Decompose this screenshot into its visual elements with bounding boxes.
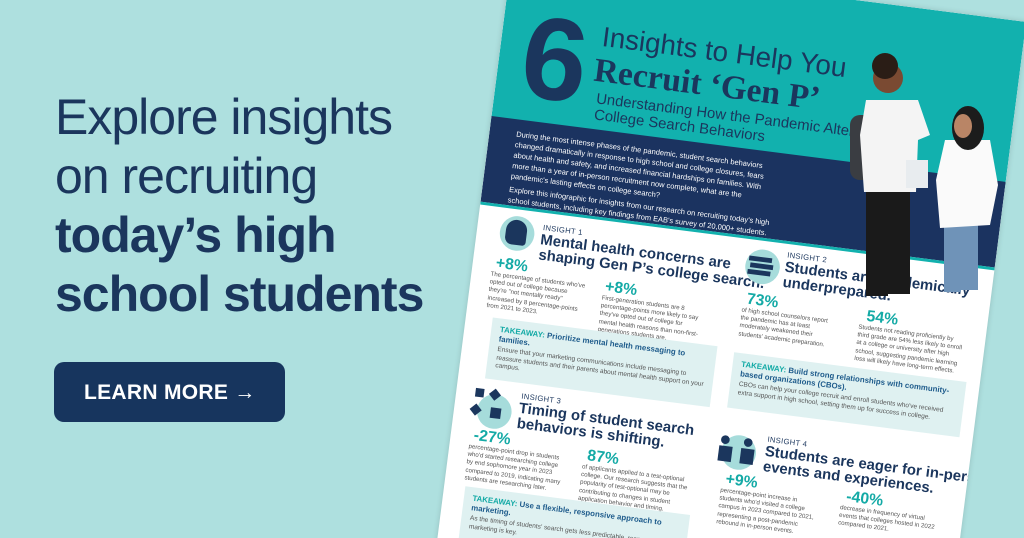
insight 4: +9% bbox=[725, 470, 759, 492]
icon: handshake bbox=[719, 433, 758, 472]
takeaway 2 bbox=[727, 352, 967, 437]
insight 3 bbox=[458, 388, 695, 538]
insight 2: 54% bbox=[865, 307, 899, 329]
takeaway 2: TAKEAWAY: Build strong relationships with community-based organizations (CBOs). bbox=[740, 360, 950, 395]
insight 3: -27% bbox=[473, 426, 512, 448]
insight 2: underprepared. bbox=[782, 274, 892, 304]
takeaway 3 bbox=[458, 486, 690, 538]
insight 4: decrease in frequency of virtual events that colleges hosted in 2022 compared to 2021. bbox=[838, 504, 935, 533]
insight 3: 87% bbox=[586, 447, 620, 468]
insight 4: Students are eager for in-person bbox=[764, 443, 994, 489]
insight 1: The percentage of students who've opted out of college because they're "not mentally ready" increased by 8 percentage-points from 2021 to 2023. bbox=[486, 271, 586, 315]
title bbox=[592, 22, 871, 145]
takeaway 1: Ensure that your marketing communications include messaging to reassure students and their parents about mental health support on your campus. bbox=[495, 346, 704, 387]
icon: books bbox=[743, 247, 782, 286]
headline: Explore insights bbox=[55, 89, 392, 145]
icon: head bbox=[498, 214, 536, 253]
takeaway 1 bbox=[485, 317, 718, 407]
insight 4: percentage-point increase in students who'd visited a college campus in 2023 compared to 2021, representing a post-pandemic rebound in in-person events. bbox=[716, 487, 814, 535]
intro paragraph: Explore this infographic for insights from our research on recruiting today's high school students, including key findings from EAB's survey of 20,000+ students. bbox=[507, 185, 770, 237]
intro paragraph: During the most intense phases of the pandemic, student search behaviors changed dramatically in response to high school and college closures, fears about health and safety, and increased financial hardships on families. With more than a year of in-person recruitment now complete, what are the pandemic's lasting effects on college search? bbox=[510, 130, 764, 199]
headline: today’s high bbox=[55, 207, 336, 263]
insight 1: Mental health concerns are bbox=[539, 232, 732, 272]
insight 2: 73% bbox=[746, 290, 779, 311]
intro paragraph bbox=[507, 130, 770, 237]
icon: flow bbox=[475, 392, 514, 431]
title: College Search Behaviors bbox=[593, 107, 766, 145]
insight 1: +8% bbox=[604, 278, 638, 299]
infographic page bbox=[434, 0, 1024, 538]
headline bbox=[55, 89, 423, 322]
insight 1 bbox=[485, 216, 765, 407]
takeaway 2: CBOs can help your college recruit and enroll students who've received extra support in high school, setting them up for success in college. bbox=[737, 381, 944, 420]
insight 1: First-generation students are 8 percentage-points more likely to say they've opted out of college for mental health reasons than non-first-generations students are. bbox=[597, 295, 699, 341]
insight 3: Timing of student search bbox=[518, 400, 695, 439]
insight 2: Students not reading proficiently by third grade are 54% less likely to enroll at a college or university after high school, suggesting pandemic learning loss will likely have long-term effects. bbox=[854, 324, 962, 374]
insight 4: -40% bbox=[845, 488, 884, 510]
insight 2: of high school counselors report the pandemic has at least moderately weakened their students' academic preparation. bbox=[738, 307, 828, 348]
insight 3: INSIGHT 3 bbox=[521, 392, 562, 405]
insight 2: Students are academically bbox=[784, 259, 971, 299]
insight 3: behaviors is shifting. bbox=[516, 416, 666, 451]
insight 1: +8% bbox=[495, 254, 529, 275]
guy bbox=[850, 115, 876, 180]
headline: school students bbox=[55, 266, 423, 322]
insight 3: percentage-point drop in students who'd started researching college by end sophomore year in 2023 compared to 2019, indicating many students are researching later. bbox=[464, 443, 561, 492]
button: learn more bbox=[54, 362, 285, 422]
insight 2 bbox=[727, 250, 971, 438]
insight 3: of applicants applied to a test-optional college. Our research suggests that the popularity of test-optional may be contributing to changes in student application behavior and timing. bbox=[578, 463, 688, 512]
header background bbox=[491, 0, 1024, 189]
insight 4: events and experiences. bbox=[762, 459, 935, 497]
title: Insights to Help You bbox=[600, 22, 848, 84]
insight 1: shaping Gen P’s college search. bbox=[537, 247, 765, 292]
girl bbox=[944, 222, 961, 292]
takeaway 1: TAKEAWAY: Prioritize mental health messaging to families. bbox=[498, 325, 686, 358]
title: Understanding How the Pandemic Altered bbox=[595, 91, 871, 142]
button: learn more: LEARN MORE → bbox=[84, 381, 256, 404]
takeaway 3: TAKEAWAY: Use a flexible, responsive approach to marketing. bbox=[471, 494, 662, 527]
insight 4 bbox=[716, 435, 994, 535]
headline: on recruiting bbox=[55, 148, 317, 204]
insight 2: INSIGHT 2 bbox=[787, 251, 828, 264]
insight 1: INSIGHT 1 bbox=[542, 223, 583, 237]
insight 4: INSIGHT 4 bbox=[767, 435, 808, 449]
title: Recruit ‘Gen P’ bbox=[592, 51, 822, 117]
